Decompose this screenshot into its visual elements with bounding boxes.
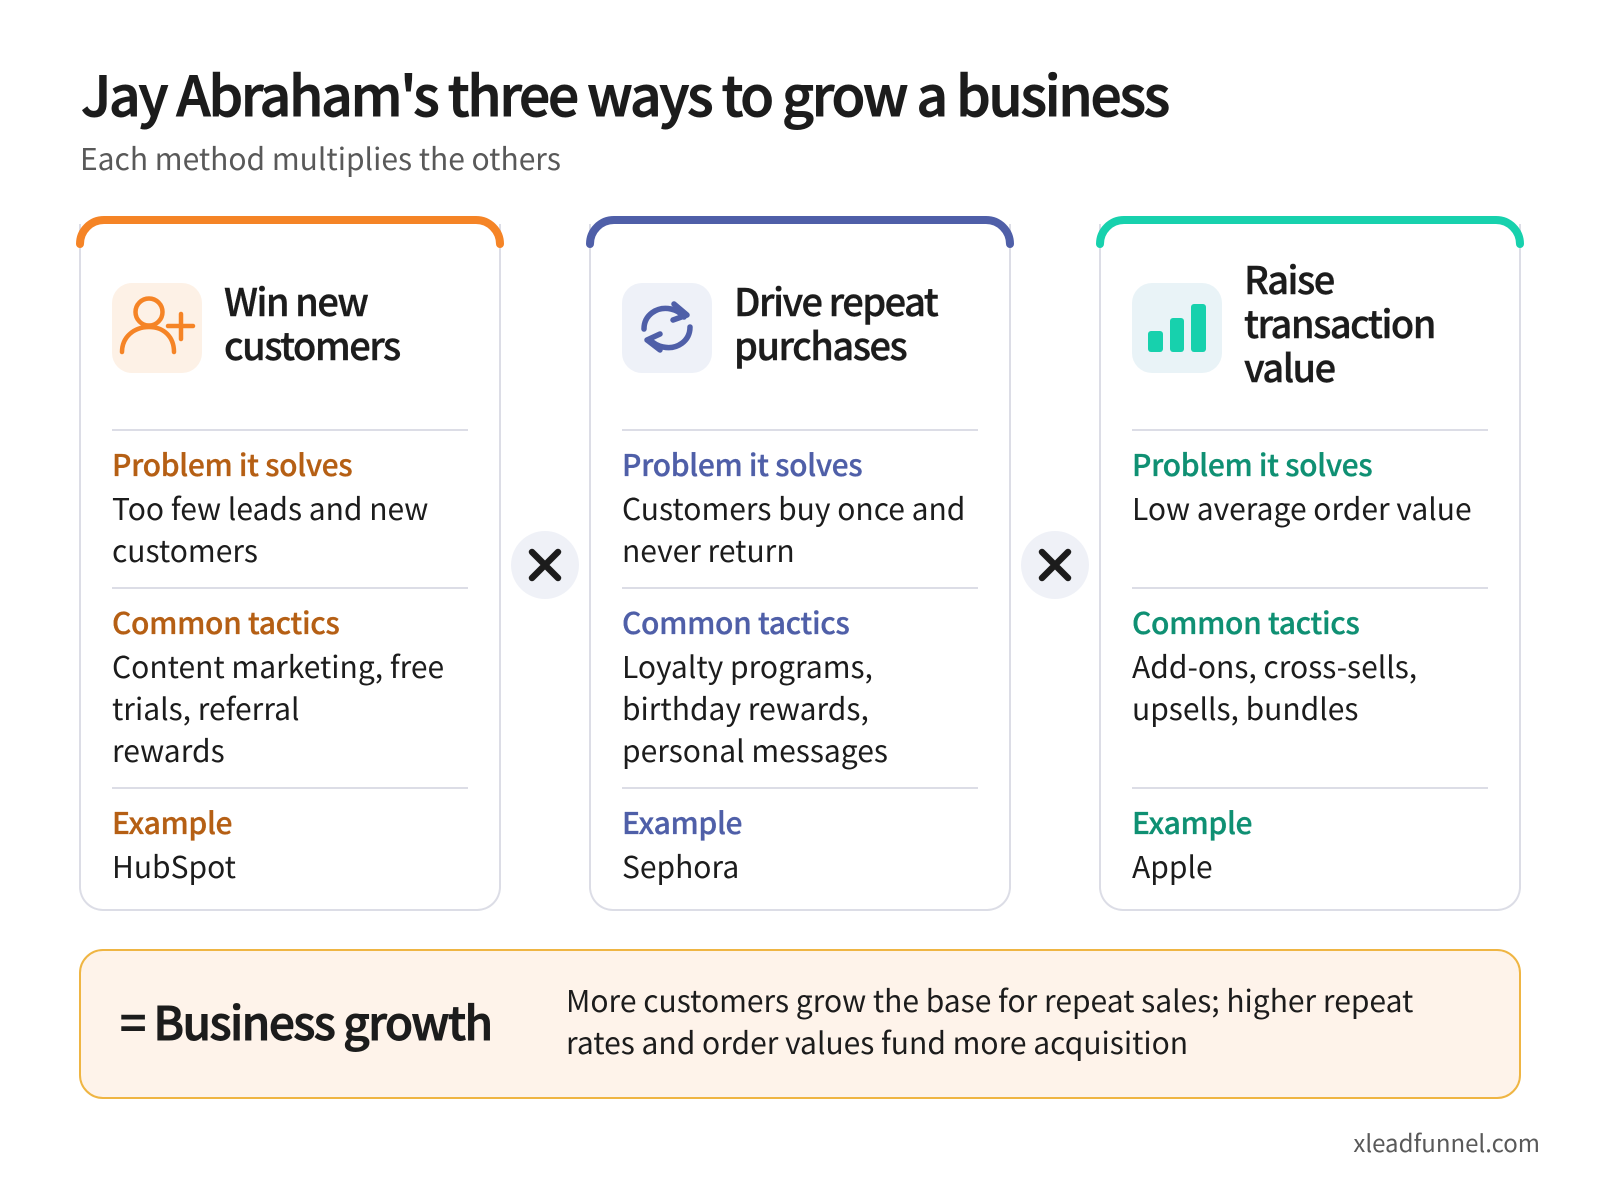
icon: refresh [622, 283, 712, 373]
section: problem [622, 429, 978, 571]
heading: raise transaction value: value [1244, 338, 1335, 393]
section: example: Apple [1132, 843, 1213, 887]
section: tactics: Loyalty programs, [622, 643, 873, 687]
subtitle: Each method multiplies the others [80, 135, 561, 179]
section: example: Example [1132, 799, 1252, 843]
section: problem: never return [622, 527, 795, 571]
heading: raise transaction value [1244, 250, 1435, 393]
section: example: HubSpot [112, 843, 236, 887]
section: tactics: trials, referral [112, 685, 300, 729]
panel: drive repeat purchases [586, 216, 1014, 911]
section: tactics [1132, 587, 1488, 729]
section: example: Example [622, 799, 742, 843]
heading: drive repeat purchases: purchases [734, 316, 906, 371]
section: tactics [622, 587, 978, 771]
footer: source: xleadfunnel.com [1353, 1124, 1540, 1159]
multiply sign 1 [511, 531, 579, 599]
section: tactics: birthday rewards, [622, 685, 869, 729]
section: problem: Too few leads and new [112, 485, 428, 529]
section: problem: Problem it solves [1132, 441, 1372, 485]
callout text [566, 977, 1413, 1063]
accent bar [1096, 216, 1524, 248]
card frame [1099, 224, 1521, 911]
section: example: Sephora [622, 843, 739, 887]
heading: raise transaction value: transaction [1244, 294, 1435, 349]
accent bar [586, 216, 1014, 248]
card frame [589, 224, 1011, 911]
section: example [112, 787, 468, 887]
title: Jay Abraham's three ways to grow a business [81, 52, 1168, 132]
section: tactics: Common tactics [1132, 599, 1359, 643]
icon: add user [112, 283, 202, 373]
section: tactics: Content marketing, free [112, 643, 444, 687]
heading: raise transaction value: Raise [1244, 250, 1334, 305]
section: problem: Problem it solves [622, 441, 862, 485]
section: tactics: Common tactics [622, 599, 849, 643]
section: tactics: rewards [112, 727, 225, 771]
callout text: More customers grow the base for repeat sales; higher repeat [566, 977, 1413, 1021]
section: tactics: upsells, bundles [1132, 685, 1358, 729]
multiply sign 2 [1021, 531, 1089, 599]
callout heading: = Business growth [120, 988, 492, 1054]
icon: bar chart [1132, 283, 1222, 373]
heading: win new customers: Win new [224, 272, 367, 327]
section: problem: Problem it solves [112, 441, 352, 485]
panel: raise transaction value [1096, 216, 1524, 911]
accent bar [76, 216, 504, 248]
section: problem: Customers buy once and [622, 485, 965, 529]
section: example [1132, 787, 1488, 887]
section: problem [112, 429, 468, 571]
section: tactics: Add-ons, cross-sells, [1132, 643, 1417, 687]
heading: win new customers [224, 272, 400, 371]
heading: win new customers: customers [224, 316, 400, 371]
section: example [622, 787, 978, 887]
heading: drive repeat purchases [734, 272, 938, 371]
section: tactics [112, 587, 468, 771]
section: tactics: Common tactics [112, 599, 339, 643]
callout text: rates and order values fund more acquisition [566, 1019, 1188, 1063]
section: tactics: personal messages [622, 727, 888, 771]
section: problem [1132, 429, 1488, 529]
card frame [79, 224, 501, 911]
heading: drive repeat purchases: Drive repeat [734, 272, 937, 327]
section: example: Example [112, 799, 232, 843]
section: problem: customers [112, 527, 258, 571]
section: problem: Low average order value [1132, 485, 1472, 529]
panel: win new customers [76, 216, 504, 911]
callout: business growth [79, 949, 1521, 1099]
